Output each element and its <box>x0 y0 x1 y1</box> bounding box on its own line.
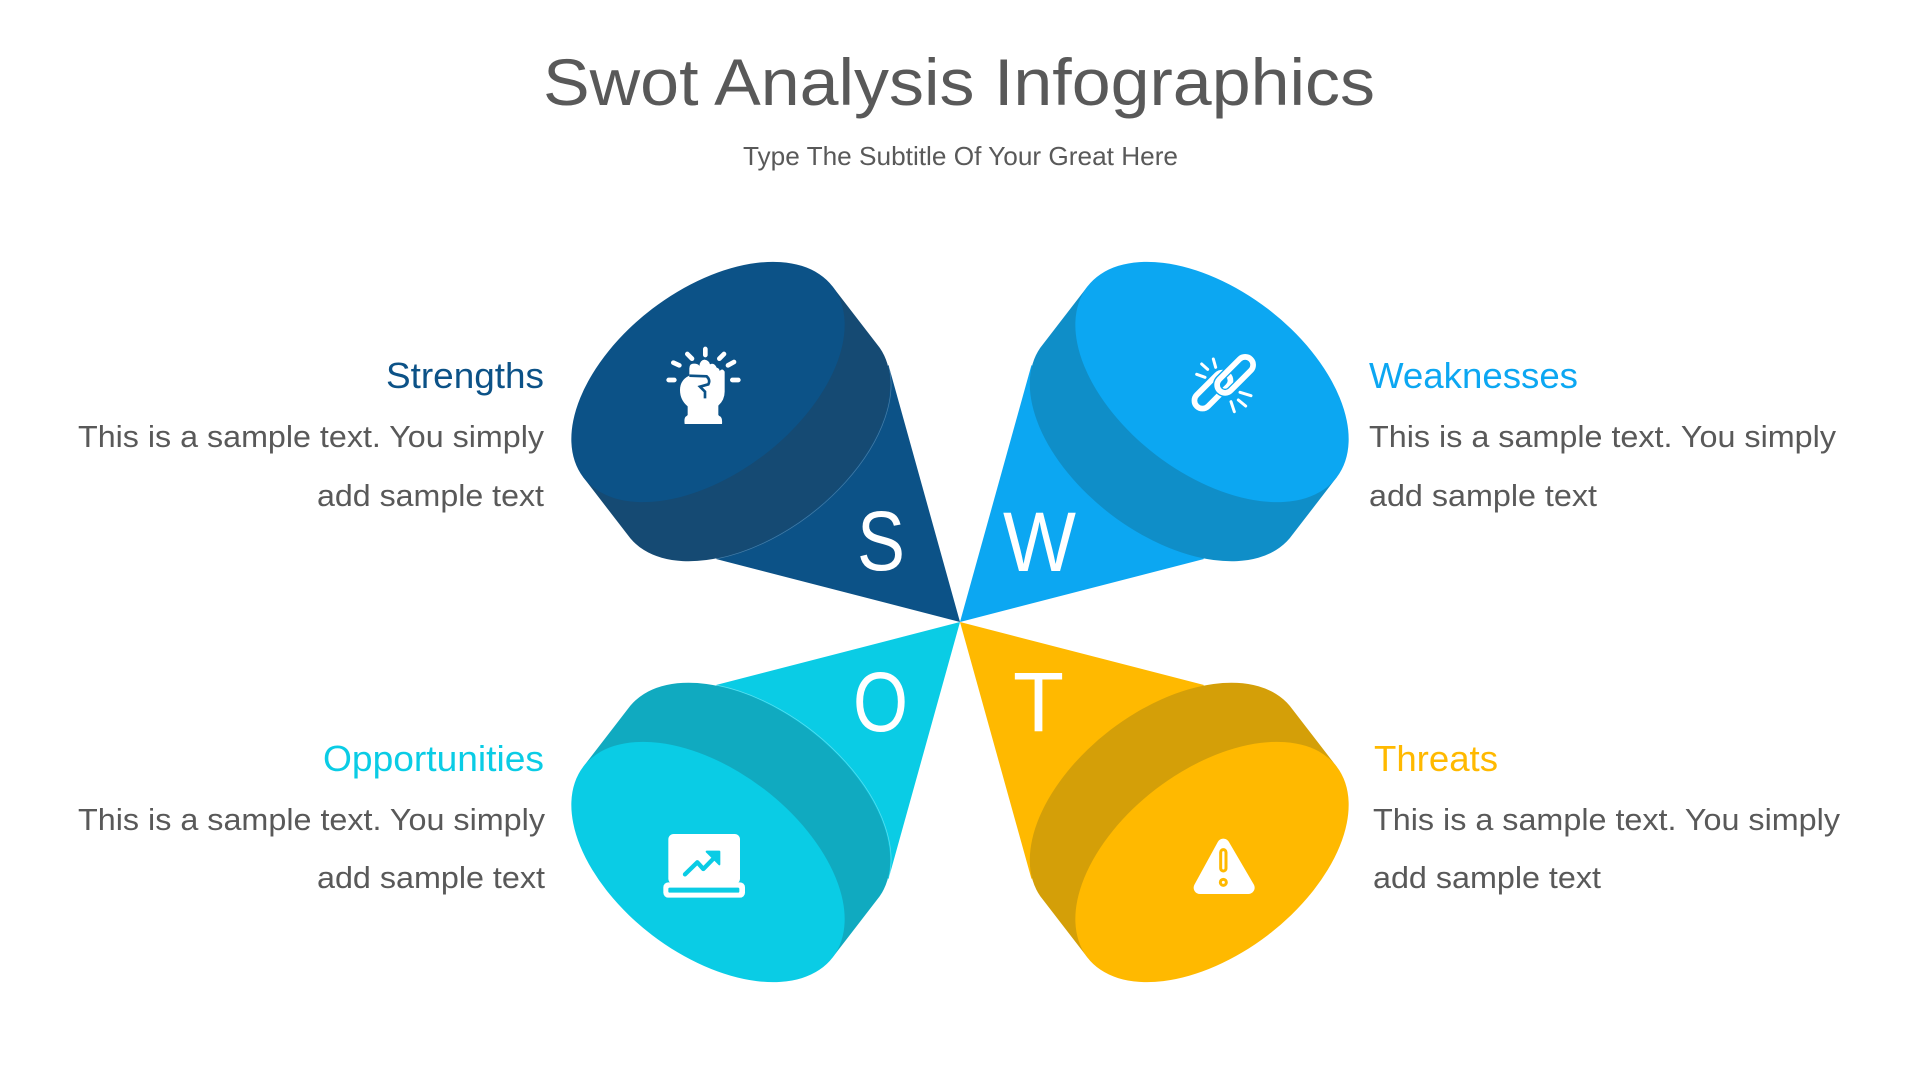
heading: strengths: Strengths <box>386 355 544 396</box>
subtitle: Type The Subtitle Of Your Great Here <box>743 141 1178 171</box>
body: opportunities: This is a sample text. You simply <box>78 802 546 837</box>
text block: threats <box>1373 738 1841 895</box>
letter O: O <box>853 655 908 749</box>
heading: threats: Threats <box>1374 738 1498 779</box>
panel: opportunities cone <box>527 622 960 1030</box>
icon: fist <box>669 349 738 424</box>
body: weaknesses: This is a sample text. You simply <box>1369 419 1837 454</box>
icon: laptop with rising chart <box>663 834 745 898</box>
letter T: T <box>1013 655 1064 749</box>
heading: weaknesses: Weaknesses <box>1369 355 1578 396</box>
body: opportunities: add sample text <box>317 860 545 895</box>
panel: weaknesses cone <box>960 214 1393 622</box>
text block: weaknesses <box>1369 355 1837 513</box>
body: threats: This is a sample text. You simply <box>1373 802 1841 837</box>
text block: opportunities <box>78 738 546 895</box>
letter W: W <box>1003 495 1076 589</box>
letter S: S <box>857 494 905 588</box>
title: Swot Analysis Infographics <box>543 45 1375 119</box>
body: threats: add sample text <box>1373 860 1601 895</box>
panel: threats cone <box>960 622 1393 1030</box>
heading: opportunities: Opportunities <box>323 738 544 779</box>
icon: warning triangle <box>1200 845 1248 888</box>
body: weaknesses: add sample text <box>1369 478 1597 513</box>
body: strengths: This is a sample text. You simply <box>78 419 545 454</box>
body: strengths: add sample text <box>317 478 544 513</box>
text block: strengths <box>78 355 545 513</box>
panel: strengths cone <box>527 214 960 622</box>
icon: broken chain link <box>1191 354 1256 412</box>
